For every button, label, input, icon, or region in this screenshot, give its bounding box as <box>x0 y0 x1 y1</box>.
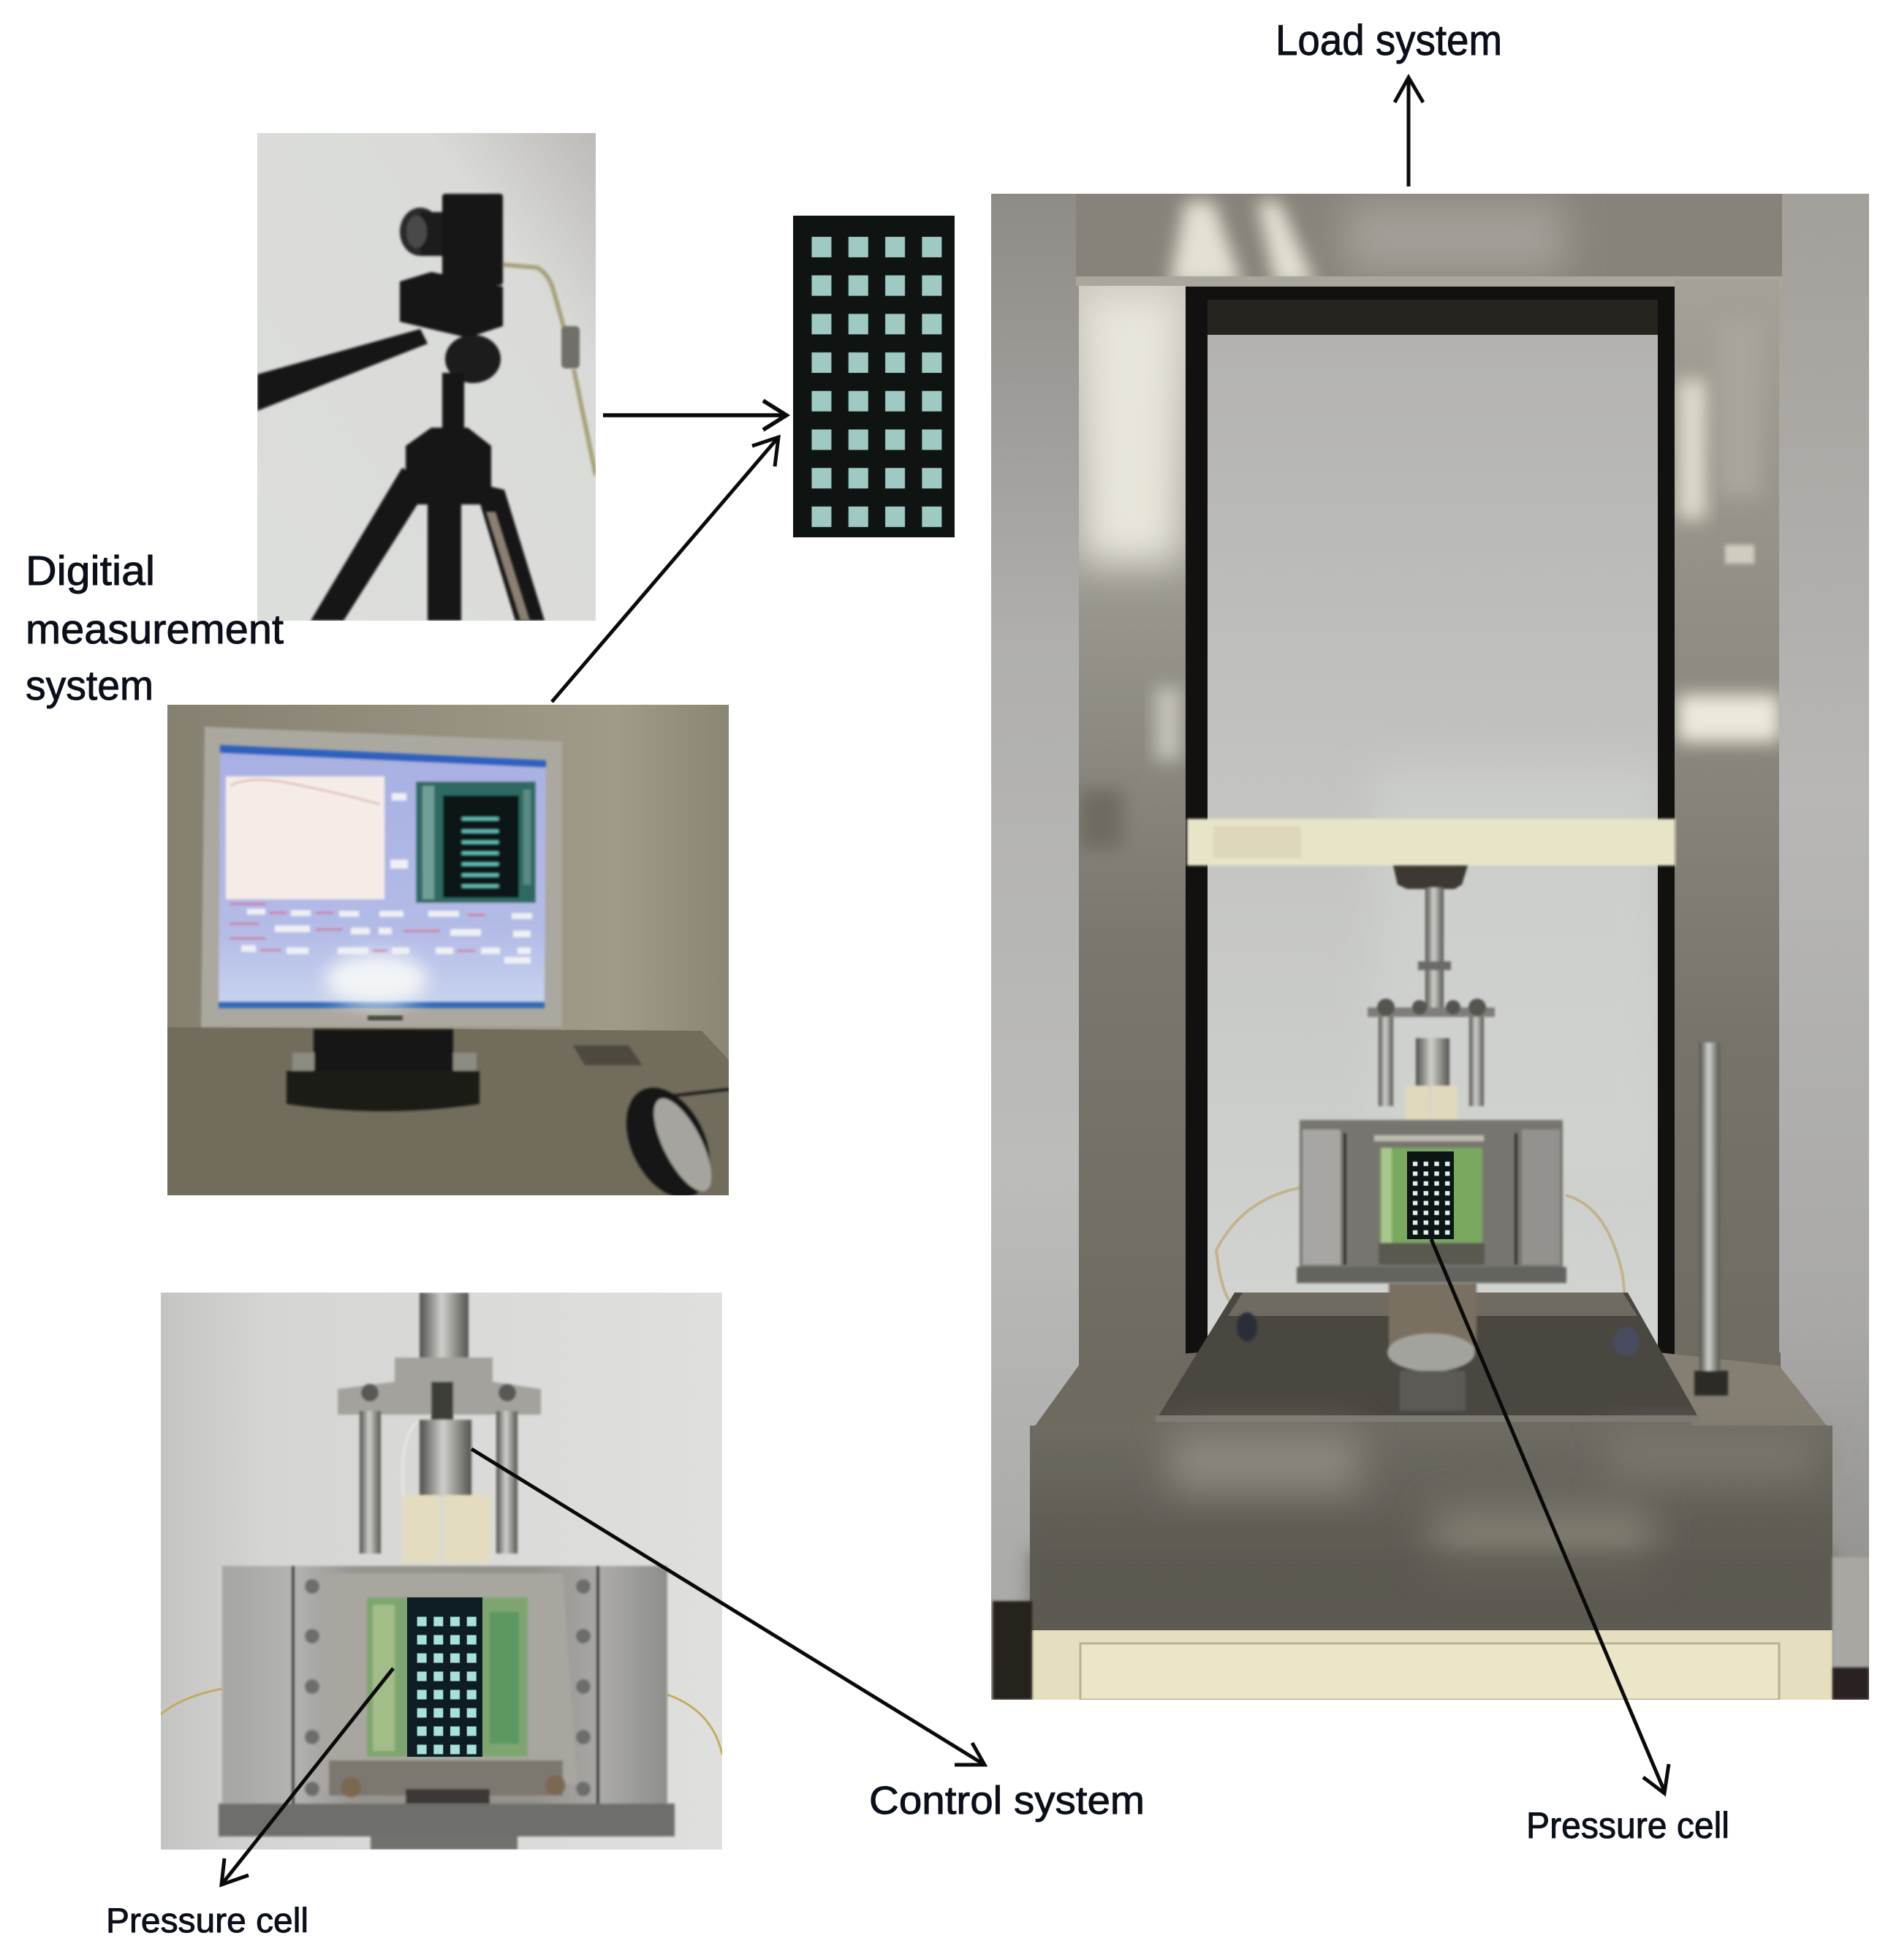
icon: tripod highlight <box>486 512 530 621</box>
panel: black target with square markers <box>793 216 955 537</box>
shoulder of base <box>1030 1352 1213 1433</box>
machine base <box>1030 1426 1832 1630</box>
green specimen window <box>367 1597 528 1757</box>
side tubes <box>161 1689 722 1755</box>
lower strap <box>329 1760 563 1796</box>
cell housing <box>219 1566 675 1850</box>
target in cell <box>1407 1151 1454 1239</box>
arrow: pressure cell close-up <box>221 1668 393 1885</box>
load rod <box>1368 866 1495 1106</box>
label: load system: Load system <box>1276 17 1502 64</box>
target on specimen <box>407 1597 482 1759</box>
monitor stand <box>287 1029 480 1111</box>
label: control system: Control system <box>869 1779 1145 1823</box>
chart <box>226 776 384 899</box>
monitor screen <box>219 745 546 1008</box>
cream blocks <box>1405 1086 1458 1130</box>
icon: tripod and camera <box>257 194 545 621</box>
tray fittings <box>1237 1312 1640 1356</box>
walls <box>991 194 1079 1700</box>
right column <box>1675 279 1780 1376</box>
upper frame and rods <box>338 1293 541 1554</box>
desk <box>167 1027 729 1195</box>
small object on desk <box>573 1045 643 1065</box>
icon: cable <box>503 265 596 475</box>
right side rod <box>1694 1043 1728 1396</box>
panel: loading machine photo <box>991 194 1869 1700</box>
side tubes <box>1216 1188 1626 1309</box>
label: digital measurement system <box>26 548 284 709</box>
cream blocks <box>402 1495 490 1562</box>
label: digital measurement system: Digitial <box>26 548 155 594</box>
load cell housing <box>1297 1120 1566 1283</box>
icon: ferrite core <box>561 326 580 368</box>
monitor bezel <box>201 727 562 1027</box>
tray <box>1156 1293 1700 1422</box>
cream cabinet <box>1032 1630 1832 1700</box>
black inner frame <box>1183 287 1675 1383</box>
panel: pressure cell close-up photo <box>161 1293 722 1850</box>
label: digital measurement system: system <box>26 662 153 709</box>
panel: camera on tripod photo <box>257 133 596 621</box>
panel: monitor and mouse photo <box>167 705 729 1211</box>
label: pressure cell right: Pressure cell <box>1526 1805 1729 1846</box>
live video image <box>416 782 536 903</box>
arrow: monitor to target <box>552 437 778 702</box>
top beam <box>1076 194 1782 287</box>
green specimen <box>1380 1148 1482 1243</box>
arrow: camera to target <box>603 401 786 430</box>
label: pressure cell left: Pressure cell <box>106 1901 308 1940</box>
arrow: control system <box>471 1449 985 1765</box>
arrow: pressure cell on machine <box>1431 1239 1669 1793</box>
base plate <box>219 1804 675 1836</box>
pedestal <box>1387 1283 1477 1411</box>
icon: mouse <box>624 1086 729 1195</box>
data fields <box>241 793 532 964</box>
arrow: to load system <box>1395 77 1423 186</box>
clutter at lower corners <box>993 1557 1869 1700</box>
monitor logo <box>368 1015 403 1021</box>
label: digital measurement system: measurement <box>26 606 284 653</box>
cream crossbeam <box>1187 819 1675 866</box>
left column <box>1079 286 1186 1375</box>
